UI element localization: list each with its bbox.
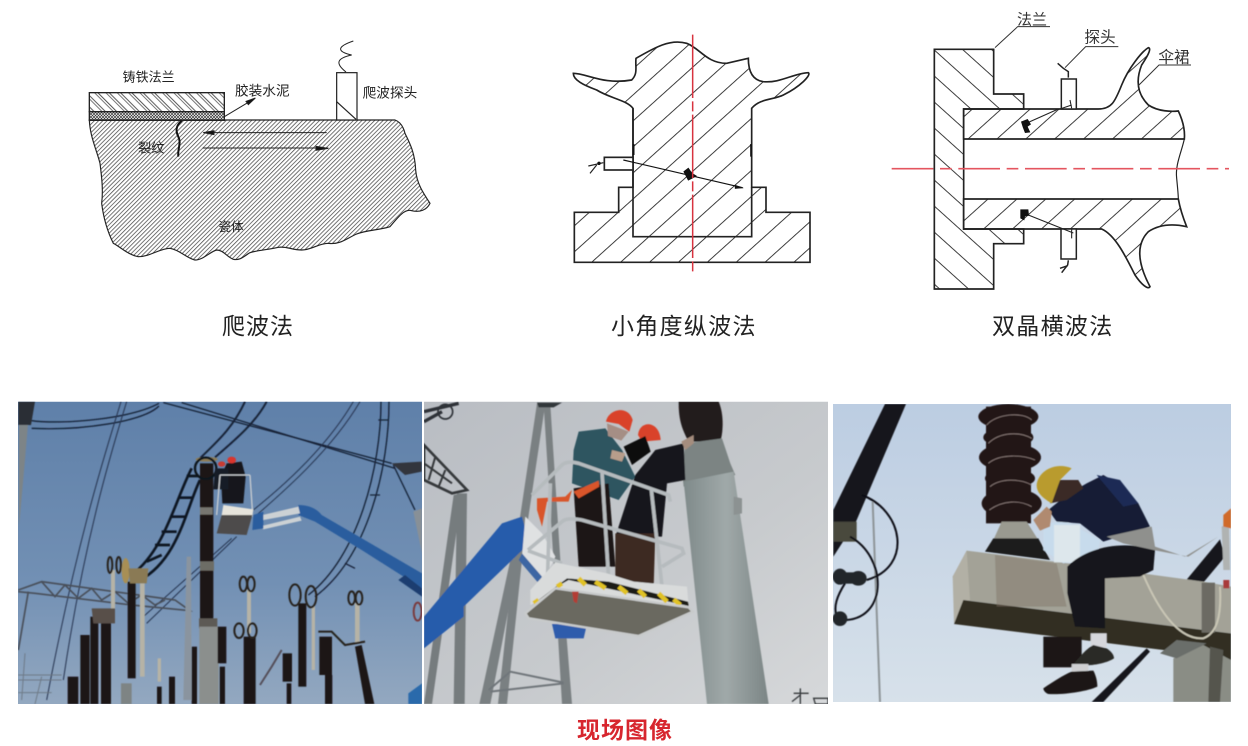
red center line <box>690 35 695 274</box>
flexible bus ladder <box>132 468 200 580</box>
safety rope <box>1143 575 1220 638</box>
diagram: creeping wave method <box>89 41 430 260</box>
ultrasonic beam <box>623 160 743 189</box>
legs and shoes <box>1043 633 1114 694</box>
leader: flange <box>995 11 1050 48</box>
corona rings <box>108 557 422 685</box>
upper defect <box>1021 119 1031 133</box>
caption: creeping wave: 爬波法 <box>222 313 294 339</box>
steel diagonals <box>833 404 1225 702</box>
caption: small-angle longitudinal wave: 小角度纵波法 <box>611 313 757 339</box>
platform railing <box>528 462 684 602</box>
boom <box>252 505 422 704</box>
upper porcelain section <box>964 48 1184 139</box>
upper probe <box>1028 63 1076 122</box>
left inspector <box>537 410 635 567</box>
insulator section <box>573 42 810 262</box>
caption: dual-crystal shear wave: 双晶横波法 <box>992 313 1114 339</box>
label: probe: 爬波探头 <box>363 86 417 101</box>
lower probe <box>1028 215 1076 273</box>
cement layer <box>89 112 224 120</box>
main column <box>679 402 769 704</box>
lower porcelain section <box>964 199 1187 288</box>
right inspector <box>610 424 694 587</box>
diagram: small-angle longitudinal wave method <box>573 35 810 274</box>
red center line <box>892 166 1229 171</box>
insulator base <box>985 522 1050 560</box>
sky <box>833 404 1231 702</box>
distant low structures <box>18 653 62 704</box>
cast iron flange <box>89 93 224 112</box>
leader arrow <box>224 98 255 117</box>
leader: shed: 伞裙 <box>1158 48 1190 66</box>
photo: inspector sitting on concrete beam <box>833 404 1231 702</box>
blue boom <box>424 517 587 648</box>
leader: probe <box>1065 28 1118 68</box>
inspector body <box>1033 466 1218 628</box>
smaller columns <box>68 582 374 704</box>
bore end <box>1176 139 1184 199</box>
wave arrows <box>203 131 328 150</box>
gantry truss <box>18 582 190 650</box>
basket body <box>525 562 693 636</box>
clamps <box>833 569 867 626</box>
label: crack: 裂纹 <box>138 141 165 156</box>
concrete beam <box>953 551 1231 660</box>
leader: flange: 法兰 <box>1017 11 1047 28</box>
main column <box>195 457 219 704</box>
cable loops <box>835 495 898 620</box>
label: cast iron flange: 铸铁法兰 <box>123 70 175 85</box>
inner boundary <box>633 108 752 237</box>
lower defect <box>1020 209 1029 220</box>
central tower legs <box>479 403 572 704</box>
creeping wave probe <box>337 41 357 120</box>
caption: site images: 现场图像 <box>577 717 673 743</box>
thin rod <box>873 502 880 702</box>
left gantry <box>424 493 467 704</box>
diagram: dual-crystal shear wave method <box>892 11 1229 289</box>
photo: two inspectors on lift basket <box>424 402 828 704</box>
leader: probe: 探头 <box>1084 28 1116 46</box>
label: cement: 胶装水泥 <box>235 83 290 99</box>
label: porcelain: 瓷体 <box>218 220 244 234</box>
lanyard <box>1222 508 1231 588</box>
support column <box>1043 637 1231 702</box>
probe <box>588 157 633 173</box>
crack <box>177 121 182 157</box>
workers in basket <box>213 457 253 535</box>
porcelain body <box>89 120 430 260</box>
defect <box>684 168 696 180</box>
photo: substation overview with boom lift <box>18 402 422 704</box>
leader: shed <box>1138 48 1191 86</box>
side marks <box>634 144 751 157</box>
porcelain insulator <box>978 404 1042 523</box>
small distant tower <box>792 688 828 704</box>
sky <box>18 402 422 704</box>
flange section <box>934 49 1024 289</box>
sky <box>424 402 828 704</box>
